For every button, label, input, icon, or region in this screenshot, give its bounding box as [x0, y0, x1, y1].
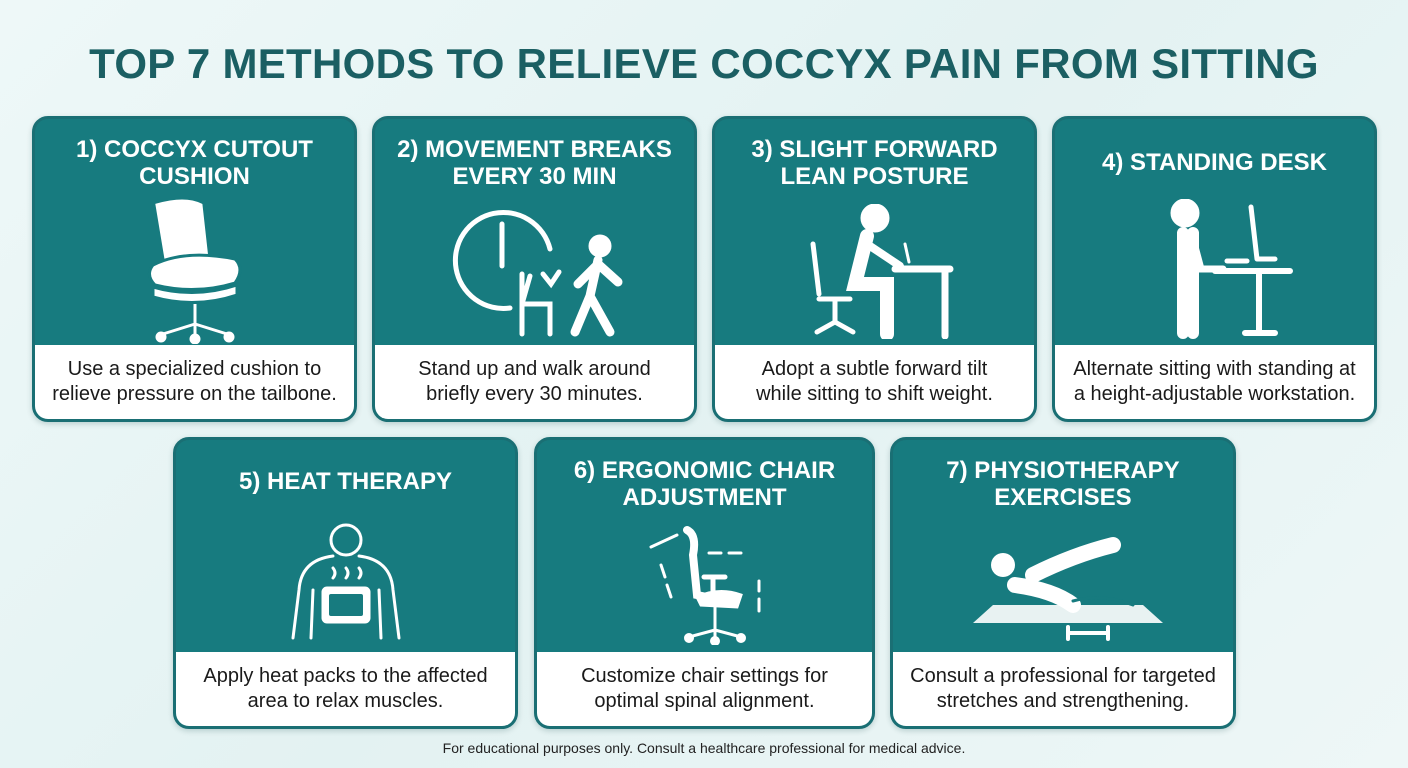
heading: 7) PHYSIOTHERAPY — [946, 457, 1180, 484]
description: a height-adjustable workstation. — [1074, 383, 1355, 405]
heading — [397, 136, 672, 190]
description: briefly every 30 minutes. — [426, 383, 643, 405]
description — [893, 652, 1233, 726]
description: Alternate sitting with standing at — [1073, 358, 1356, 380]
description: Use a specialized cushion to — [68, 358, 321, 380]
description — [1055, 345, 1374, 419]
heading: 4) STANDING DESK — [1102, 149, 1327, 176]
description: relieve pressure on the tailbone. — [52, 383, 337, 405]
heading: LEAN POSTURE — [780, 163, 968, 190]
footer disclaimer: For educational purposes only. Consult a healthcare professional for medical advice. — [443, 740, 965, 756]
icon: standing at desk — [1170, 199, 1293, 339]
heading — [751, 136, 998, 190]
heading: ADJUSTMENT — [622, 484, 786, 511]
heading: 3) SLIGHT FORWARD — [751, 136, 998, 163]
heading — [574, 457, 835, 511]
description — [715, 345, 1034, 419]
panel: ergonomic chair — [534, 437, 875, 729]
description: while sitting to shift weight. — [756, 383, 993, 405]
heading: 2) MOVEMENT BREAKS — [397, 136, 672, 163]
panel: standing desk — [1052, 116, 1377, 422]
description — [375, 345, 694, 419]
description — [176, 652, 515, 726]
panel: physiotherapy — [890, 437, 1236, 729]
icon: body with heat pack — [292, 524, 400, 640]
panel: cushion — [32, 116, 357, 422]
heading: 5) HEAT THERAPY — [239, 468, 452, 495]
icon: exercise on mat — [973, 537, 1163, 641]
icon: chair with cushion — [151, 200, 238, 344]
panel: forward lean — [712, 116, 1037, 422]
title: TOP 7 METHODS TO RELIEVE COCCYX PAIN FROM SITTING — [89, 40, 1319, 87]
heading: 6) ERGONOMIC CHAIR — [574, 457, 835, 484]
heading — [76, 136, 313, 190]
heading: CUSHION — [139, 163, 250, 190]
description: Adopt a subtle forward tilt — [762, 358, 987, 380]
description — [35, 345, 354, 419]
description: stretches and strengthening. — [937, 690, 1189, 712]
description — [537, 652, 872, 726]
description: optimal spinal alignment. — [594, 690, 815, 712]
heading: EXERCISES — [994, 484, 1132, 511]
description: Apply heat packs to the affected — [203, 665, 488, 687]
icon: leaning person at desk — [810, 204, 954, 339]
icon: adjustable chair — [649, 526, 760, 645]
icon: clock and walker — [452, 210, 622, 336]
heading — [946, 457, 1180, 511]
description: Consult a professional for targeted — [910, 665, 1216, 687]
description: area to relax muscles. — [248, 690, 443, 712]
heading: EVERY 30 MIN — [452, 163, 617, 190]
heading: 1) COCCYX CUTOUT — [76, 136, 313, 163]
description: Customize chair settings for — [581, 665, 828, 687]
panel: heat therapy — [173, 437, 518, 729]
panel: movement breaks — [372, 116, 697, 422]
description: Stand up and walk around — [418, 358, 651, 380]
